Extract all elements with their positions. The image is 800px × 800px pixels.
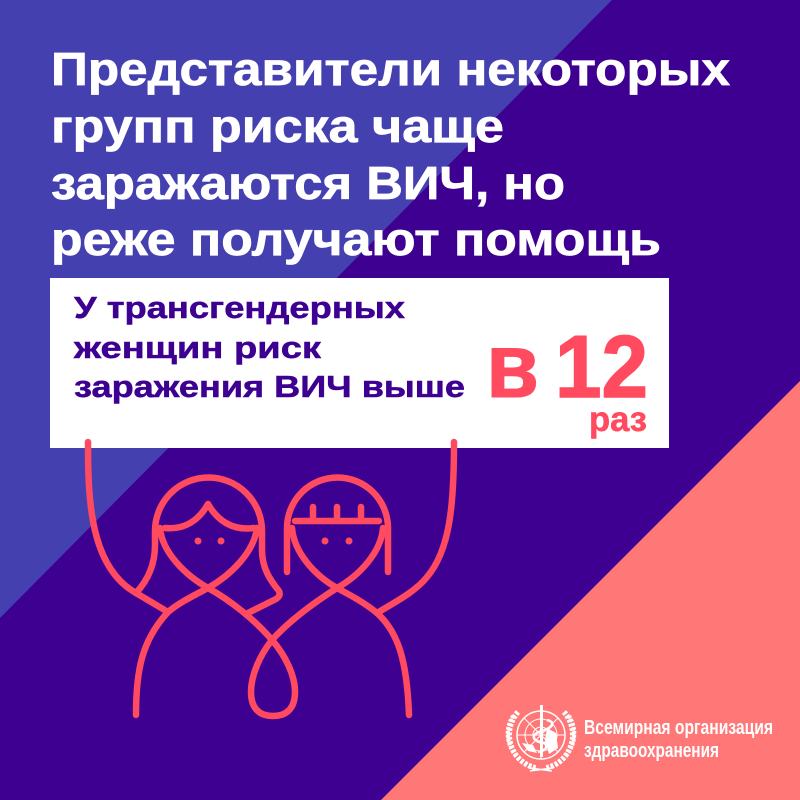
title	[51, 43, 730, 265]
logo: WHO emblem	[508, 705, 574, 771]
panel: statistic banner	[50, 278, 669, 448]
organisation name	[584, 717, 773, 762]
banner text: заражения ВИЧ выше	[74, 369, 465, 404]
title: заражаются ВИЧ, но	[51, 157, 565, 209]
right woman head	[287, 478, 388, 572]
statistic: 12 times: в	[486, 315, 539, 417]
bodies and ribbon loop	[136, 588, 409, 716]
left woman face	[160, 528, 257, 588]
banner text: У трансгендерных	[74, 290, 406, 325]
left woman fringe	[165, 504, 254, 528]
banner text	[73, 290, 465, 404]
left woman head and hair	[136, 477, 280, 613]
title: реже получают помощь	[51, 213, 661, 265]
right arm	[377, 442, 454, 613]
title: групп риска чаще	[51, 100, 504, 152]
statistic: 12 times: 12	[555, 317, 648, 416]
banner text: женщин риск	[73, 330, 322, 365]
title: Представители некоторых	[51, 43, 730, 95]
organisation name: здравоохранения	[584, 740, 719, 762]
statistic: 12 times	[486, 315, 648, 439]
statistic: 12 times: раз	[589, 400, 647, 439]
eyes	[194, 538, 352, 544]
right woman face	[292, 528, 383, 588]
right woman fringe	[295, 507, 379, 521]
left arm	[88, 442, 168, 612]
illustration: two women holding banner	[88, 442, 454, 716]
